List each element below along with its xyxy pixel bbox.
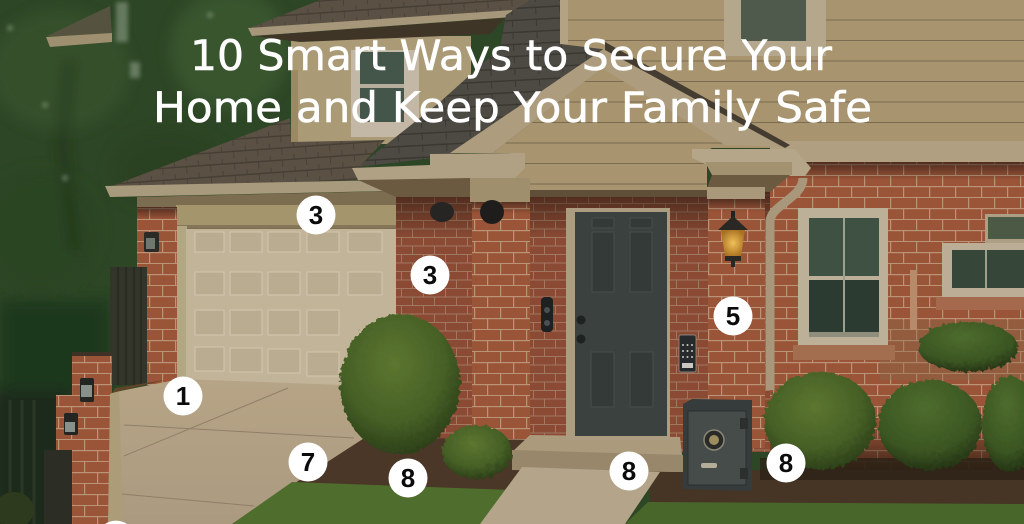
garage side brick	[137, 207, 177, 385]
porch left beam	[352, 153, 530, 202]
lawn	[232, 482, 1024, 524]
brick pillar	[56, 352, 112, 524]
number markers	[105, 196, 806, 524]
marker 8 safe: 8	[779, 448, 793, 478]
central roof	[358, 0, 610, 167]
marker 3 wall	[410, 256, 450, 294]
central brick wall	[396, 190, 770, 452]
marker 1: 1	[176, 381, 190, 411]
wall lights	[64, 232, 159, 435]
upper siding wall	[556, 0, 1024, 162]
keypad	[679, 335, 696, 372]
front step	[512, 435, 684, 472]
gate and left fence	[0, 267, 147, 524]
brick columns	[472, 198, 765, 448]
video doorbell	[541, 297, 553, 332]
title: 10 Smart Ways to Secure Your	[190, 31, 833, 80]
downspout	[770, 178, 803, 390]
garage frame and door	[176, 205, 396, 385]
title: Home and Keep Your Family Safe	[153, 83, 872, 132]
marker 3 garage header	[296, 196, 336, 234]
driveway	[108, 379, 366, 524]
security cameras	[430, 200, 504, 224]
lantern	[718, 211, 748, 267]
marker 5	[714, 296, 752, 336]
porch right beam	[692, 149, 811, 199]
small distant roof	[46, 6, 112, 47]
porch gable	[450, 42, 790, 197]
marker 8 safe	[766, 444, 806, 482]
marker 3 wall: 3	[423, 260, 437, 290]
shrubs	[340, 314, 1024, 479]
marker 8 mulch	[388, 458, 428, 498]
marker 1	[164, 376, 202, 416]
marker 8 mulch: 8	[401, 463, 415, 493]
garage eave	[105, 180, 396, 230]
marker 5: 5	[726, 301, 740, 331]
mulch beds	[295, 437, 1024, 506]
dormer	[291, 36, 471, 144]
marker cropped at bottom edge	[105, 521, 127, 524]
marker 7	[288, 442, 328, 482]
upper roof	[248, 0, 540, 42]
marker 3 garage header: 3	[309, 200, 323, 230]
title	[153, 31, 872, 132]
far right window	[910, 214, 1024, 330]
marker 8 walkway	[610, 452, 648, 490]
right window	[793, 208, 895, 360]
walkway	[480, 467, 660, 524]
brick wall right wing	[770, 162, 1024, 475]
marker 7: 7	[301, 447, 315, 477]
lower left roof	[112, 118, 385, 188]
front door	[566, 208, 670, 440]
safe	[683, 399, 752, 491]
marker 8 walkway: 8	[622, 456, 636, 486]
